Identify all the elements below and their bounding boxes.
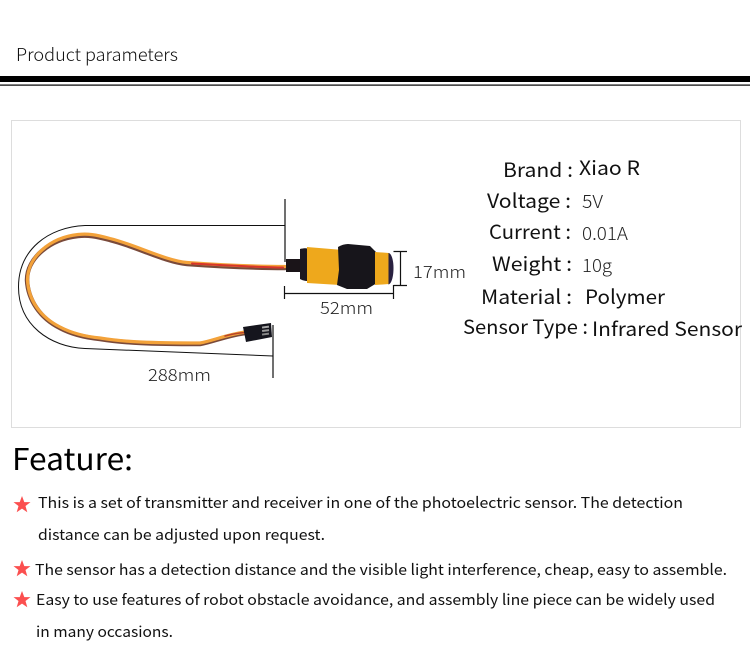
spec table: Sensor Type : xyxy=(463,311,588,340)
spec table: Brand : xyxy=(503,154,573,183)
label: 288mm: 288mm xyxy=(148,361,211,386)
spec table: 10g xyxy=(582,252,612,278)
icon: wire connector xyxy=(243,323,272,342)
icon: photoelectric sensor xyxy=(286,244,394,289)
feature text 1: This is a set of transmitter and receiver in one of the photoelectric sensor. The detection xyxy=(38,492,683,513)
spec table: Weight : xyxy=(492,248,572,277)
icon: sensor wire xyxy=(27,234,285,344)
diagram: wire length dimension xyxy=(18,199,285,386)
icon: star 1 xyxy=(14,496,30,512)
diagram: sensor dimension lines xyxy=(284,252,407,299)
label: 52mm: 52mm xyxy=(320,294,373,319)
feature text 1: distance can be adjusted upon request. xyxy=(38,524,325,545)
icon: star 2 xyxy=(14,560,30,576)
heading: feature: Feature: xyxy=(12,435,133,479)
feature text 3 xyxy=(36,589,715,642)
panel: product diagram frame xyxy=(12,120,740,428)
spec table xyxy=(463,152,742,342)
spec table: Polymer xyxy=(585,281,665,310)
spec table: Xiao R xyxy=(579,152,640,181)
spec table: 5V xyxy=(582,188,603,214)
feature text 3: in many occasions. xyxy=(36,621,173,642)
feature text 1 xyxy=(38,492,683,545)
feature text 3: Easy to use features of robot obstacle avoidance, and assembly line piece can be widely used xyxy=(36,589,715,610)
spec table: Current : xyxy=(489,216,571,245)
spec table: Voltage : xyxy=(487,185,571,214)
label: 17mm: 17mm xyxy=(413,258,466,283)
feature text 2: The sensor has a detection distance and the visible light interference, cheap, easy to assemble. xyxy=(35,559,727,580)
feature list xyxy=(14,492,727,642)
spec table: Material : xyxy=(481,281,572,310)
heading: product parameters: Product parameters xyxy=(16,41,178,67)
icon: star 3 xyxy=(14,591,30,607)
spec table: 0.01A xyxy=(582,220,628,246)
heading: product parameters xyxy=(0,41,750,86)
spec table: Infrared Sensor xyxy=(592,313,742,342)
